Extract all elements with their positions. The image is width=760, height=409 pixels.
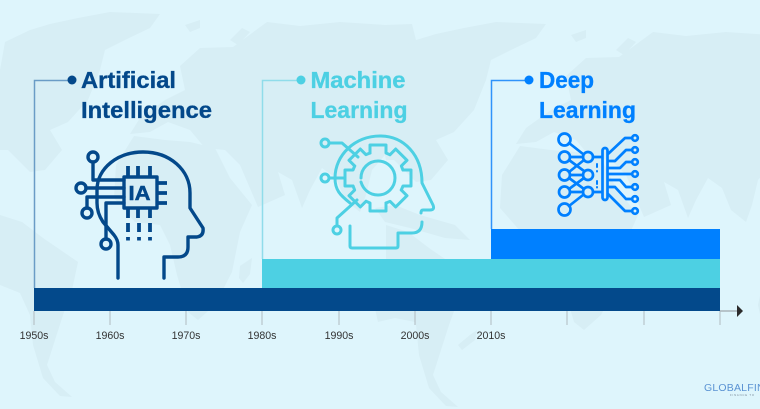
marker dot [296,76,306,84]
bar: machine learning span [262,259,720,288]
heading: Deep [539,67,594,93]
marker dot [524,76,534,84]
icon: neural network [558,134,638,216]
decade labels: 1960s [96,330,124,342]
decade labels: 2000s [401,330,429,342]
icon: head with chip [76,152,203,278]
icon label: IA: IA [128,183,150,205]
heading: Learning [539,97,636,123]
connector line [492,80,526,229]
timeline axis [34,305,743,325]
arrowhead [737,305,743,317]
decade labels: 1990s [325,330,353,342]
heading: Learning [310,97,408,123]
marker dot [68,76,76,84]
connector line [34,80,70,288]
icon: head with gear [321,136,434,248]
logo: FINANCE TO [730,393,755,397]
decade labels: 1980s [248,330,276,342]
panel: artificial intelligence [34,67,212,288]
panel: deep learning [492,67,638,229]
decade labels: 2010s [477,330,505,342]
bar: deep learning span [491,229,720,259]
heading: Machine [310,67,406,93]
heading: Intelligence [81,97,212,123]
connector line [262,80,298,259]
decade labels: 1950s [20,330,48,342]
heading: Artificial [81,67,176,93]
panel: machine learning [262,67,434,259]
bar: artificial intelligence span [34,288,720,311]
decade labels: 1970s [172,330,200,342]
decade labels [20,330,505,342]
